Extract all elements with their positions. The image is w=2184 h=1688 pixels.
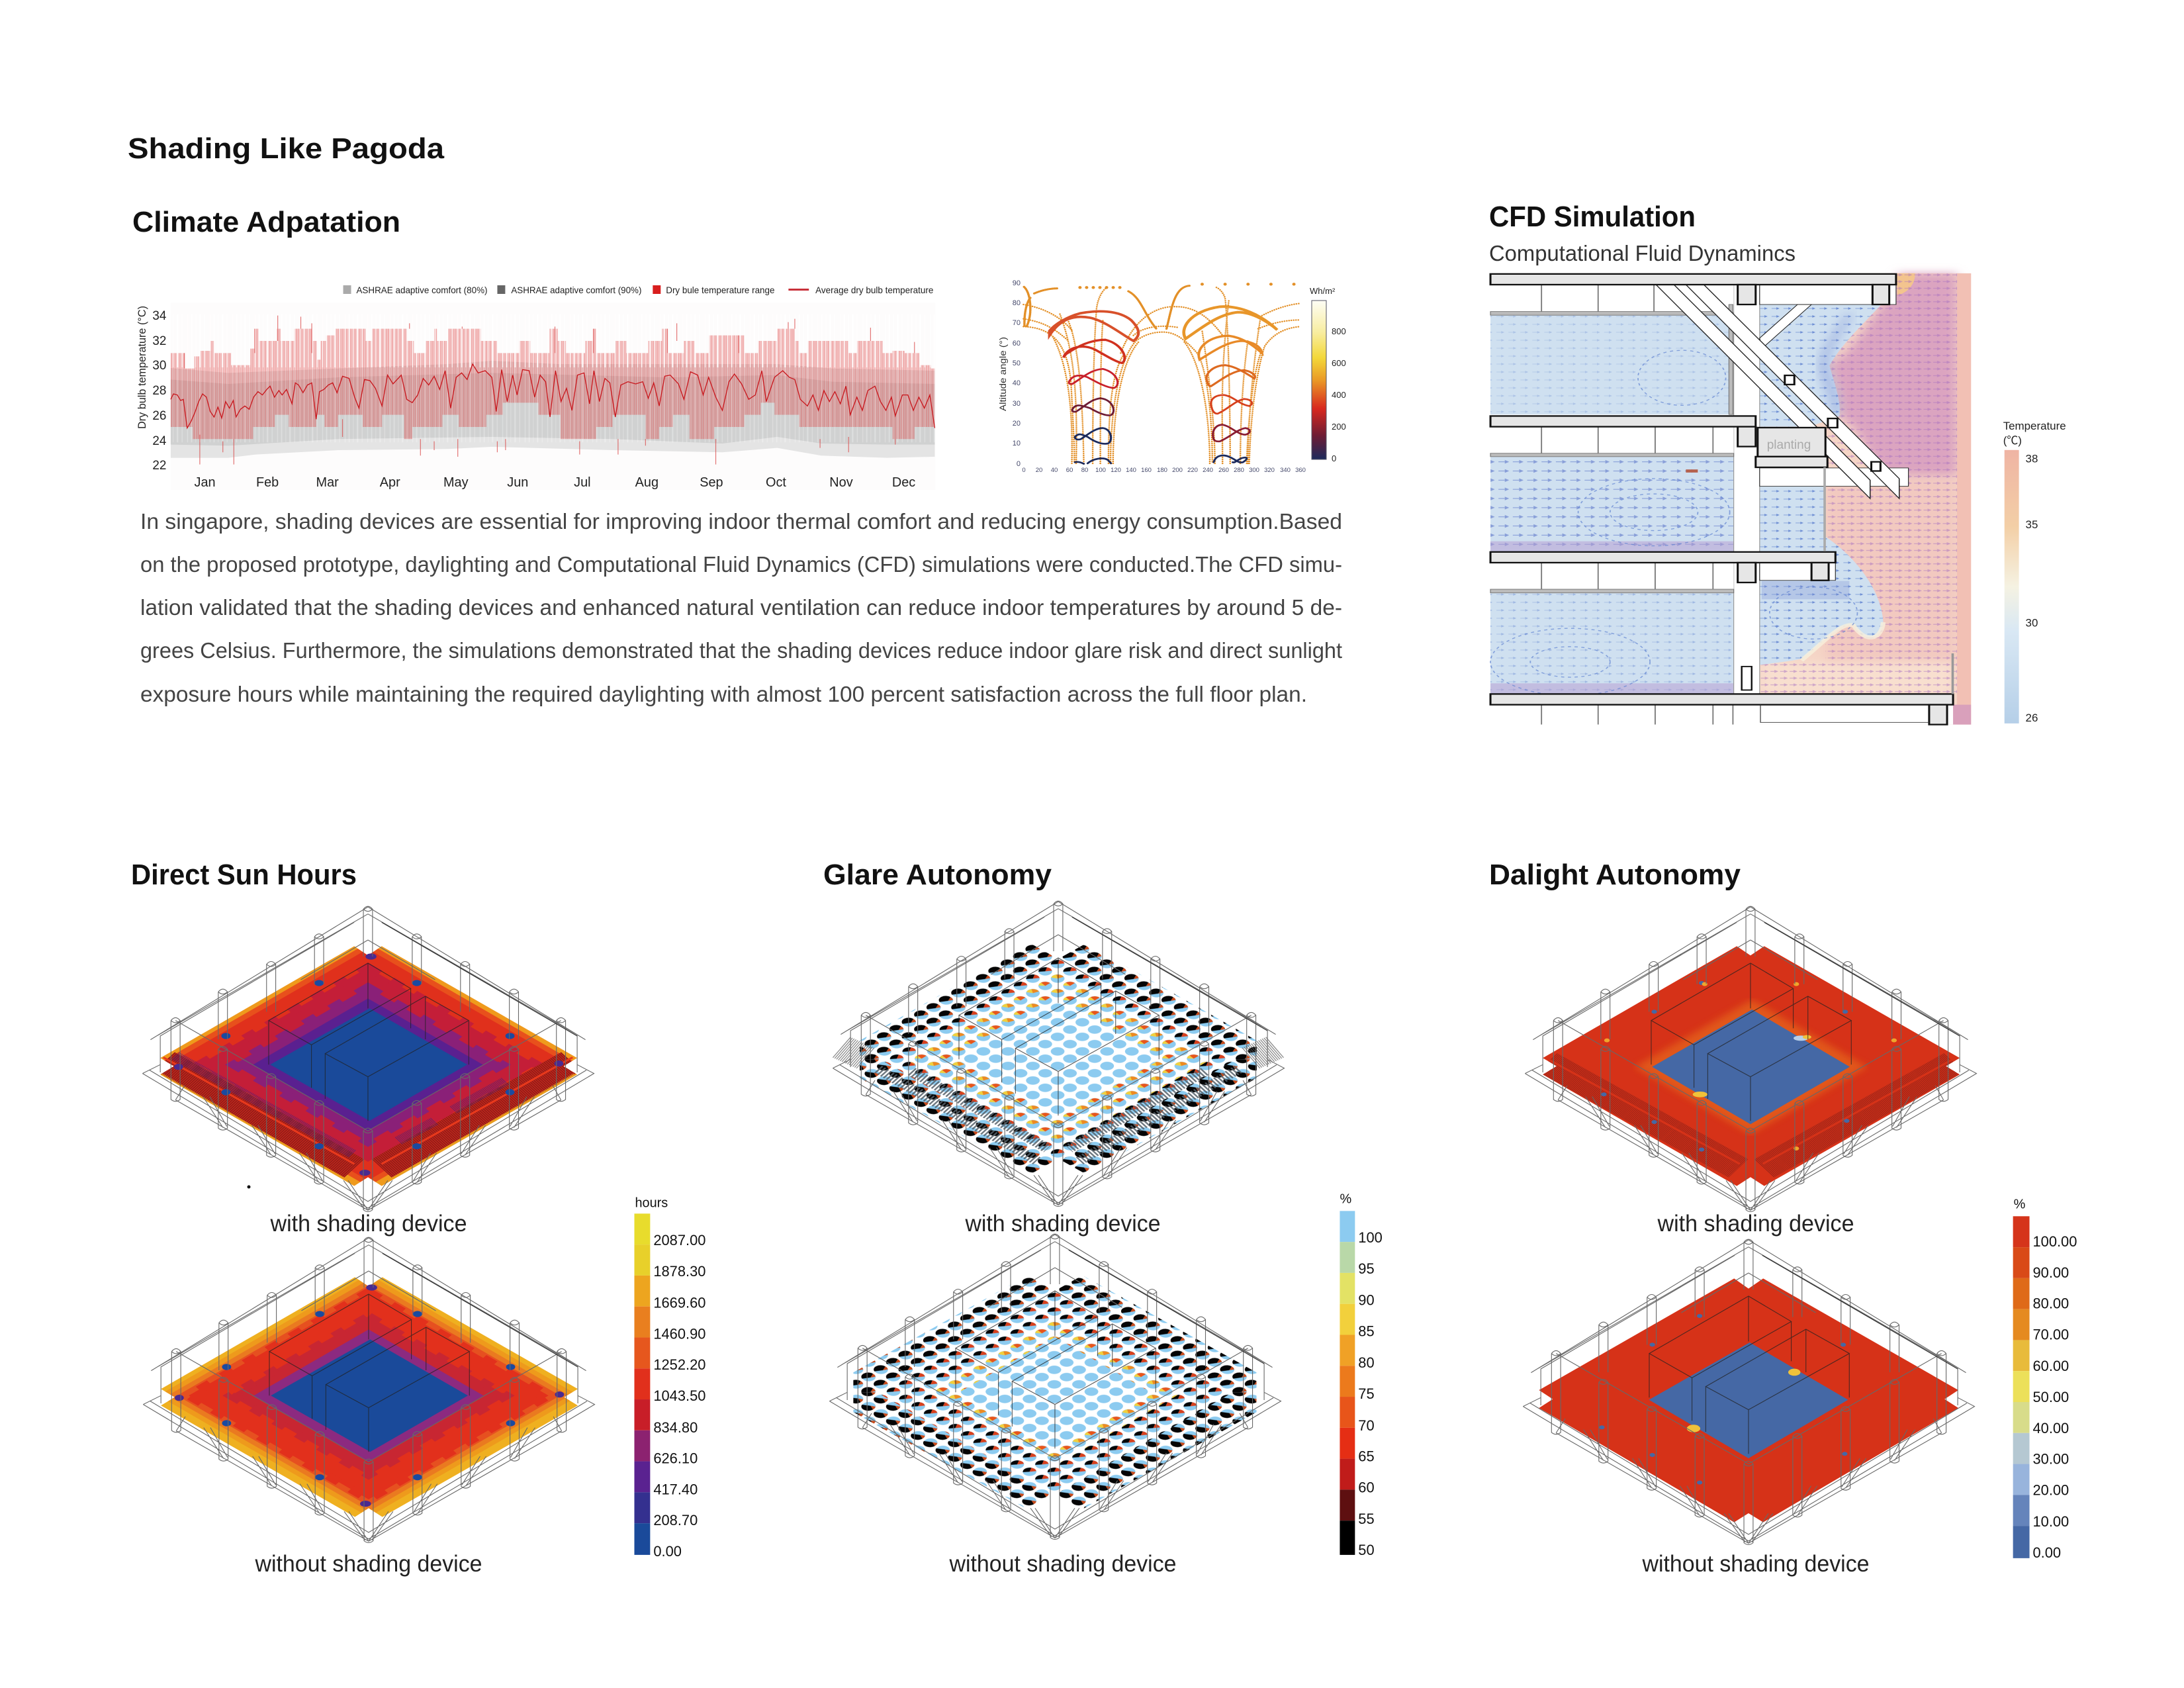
month labels <box>194 475 915 490</box>
legend: Dry bule temperature range <box>666 285 774 295</box>
month labels: Nov <box>829 475 853 490</box>
x ticks: 140 <box>1126 467 1136 474</box>
x ticks: 40 <box>1051 467 1058 474</box>
subheading: computational fluid dynamics: Computational Fluid Dynamincs <box>1489 241 1796 265</box>
legend: daylight percent: 90.00 <box>2032 1264 2069 1281</box>
colour bar Wh/m2 <box>1310 286 1346 463</box>
legend: hours: 1878.30 <box>653 1263 705 1280</box>
y ticks and title: 10 <box>1013 440 1021 447</box>
temperature legend: 35 <box>2026 518 2038 531</box>
y ticks and title: 40 <box>1013 379 1021 387</box>
legend: glare percent: 90 <box>1358 1292 1375 1309</box>
chart: dry bulb temperature over the year <box>136 285 935 490</box>
diagram: direct sun hours without shading <box>143 1237 594 1542</box>
diagram: glare autonomy with shading <box>833 901 1284 1206</box>
x ticks: 0 <box>1022 467 1026 474</box>
legend: glare percent: 65 <box>1358 1448 1375 1465</box>
diagram: glare autonomy without shading <box>829 1234 1281 1539</box>
month labels: Aug <box>635 475 659 490</box>
y ticks and title: 50 <box>1013 359 1021 367</box>
diagram: direct sun hours with shading <box>142 906 594 1211</box>
legend: glare percent: 55 <box>1358 1511 1375 1527</box>
y axis labels: 26 <box>152 409 166 423</box>
month labels: Sep <box>700 475 723 490</box>
legend: hours: 208.70 <box>653 1512 698 1528</box>
legend: hours: 834.80 <box>653 1419 698 1436</box>
x ticks: 280 <box>1234 467 1244 474</box>
text block: climate paragraph: on the proposed prototype, daylighting and Computational Fluid Dynamics (CFD) simulations were conducted.The CFD simu- <box>140 552 1342 577</box>
x ticks: 220 <box>1187 467 1198 474</box>
legend: hours: 1669.60 <box>653 1295 705 1311</box>
y ticks and title: Altitude angle (°) <box>997 337 1008 411</box>
month labels: Apr <box>380 475 400 490</box>
legend: glare percent: 60 <box>1358 1479 1375 1495</box>
y axis labels: 24 <box>152 434 166 448</box>
legend: daylight percent: % <box>2014 1197 2025 1211</box>
heading: glare autonomy: Glare Autonomy <box>823 859 1052 891</box>
x ticks: 260 <box>1218 467 1229 474</box>
legend: hours: 417.40 <box>653 1481 698 1497</box>
y axis labels: 32 <box>152 334 166 348</box>
diagram: daylight autonomy without shading <box>1523 1239 1974 1544</box>
text block: climate paragraph <box>140 509 1342 706</box>
legend: hours: 626.10 <box>653 1450 698 1467</box>
legend: daylight percent: 0.00 <box>2032 1544 2061 1561</box>
x ticks: 240 <box>1203 467 1213 474</box>
month labels: Jun <box>507 475 528 490</box>
x ticks: 200 <box>1172 467 1183 474</box>
x ticks: 320 <box>1264 467 1275 474</box>
x ticks: 360 <box>1295 467 1306 474</box>
y ticks and title <box>997 279 1021 468</box>
legend: hours: 1252.20 <box>653 1356 705 1373</box>
text block: climate paragraph: In singapore, shading devices are essential for improving indoor thermal comfort and reducing energy consumption.Based <box>140 509 1342 534</box>
month labels: Jan <box>194 475 216 490</box>
y axis labels: 22 <box>152 459 166 473</box>
x ticks: 80 <box>1081 467 1088 474</box>
legend: Average dry bulb temperature <box>815 285 933 295</box>
y axis labels: 28 <box>152 384 166 398</box>
temperature legend: Temperature <box>2003 420 2066 432</box>
legend: ASHRAE adaptive comfort (90%) <box>511 285 641 295</box>
heading: CFD simulation: CFD Simulation <box>1489 201 1696 233</box>
chart: sun path altitude <box>997 279 1346 474</box>
legend: glare percent: 100 <box>1358 1229 1383 1246</box>
temperature legend <box>2003 420 2066 724</box>
legend: glare percent: 50 <box>1358 1542 1375 1558</box>
y axis labels: 34 <box>152 309 166 323</box>
legend: hours: 1043.50 <box>653 1387 705 1404</box>
title: Shading Like Pagoda <box>128 132 445 165</box>
legend: glare percent: 85 <box>1358 1323 1375 1339</box>
month labels: Feb <box>256 475 279 490</box>
caption: with shading device (glare): with shading device <box>965 1211 1161 1237</box>
legend: daylight percent <box>2013 1197 2077 1561</box>
month labels: May <box>443 475 469 490</box>
colour bar Wh/m2: Wh/m² <box>1310 286 1336 296</box>
colour bar Wh/m2: 0 <box>1332 453 1336 463</box>
legend: daylight percent: 50.00 <box>2032 1389 2069 1405</box>
y axis labels: Dry bulb temperature (°C) <box>136 306 148 429</box>
colour bar Wh/m2: 800 <box>1332 326 1346 336</box>
legend: daylight percent: 40.00 <box>2032 1420 2069 1436</box>
text block: climate paragraph: grees Celsius. Furthermore, the simulations demonstrated that the shading devices reduce indoor glare risk and direct sunlight <box>140 638 1342 663</box>
x ticks: 340 <box>1280 467 1291 474</box>
temperature legend: (℃) <box>2003 434 2022 447</box>
panel: CFD section <box>1490 273 2066 725</box>
heading: daylight autonomy: Dalight Autonomy <box>1489 859 1741 891</box>
x ticks: 120 <box>1111 467 1121 474</box>
temperature legend: 38 <box>2026 453 2038 465</box>
x ticks: 180 <box>1157 467 1167 474</box>
caption: with shading device (sun hours): with shading device <box>270 1211 467 1237</box>
legend: daylight percent: 30.00 <box>2032 1451 2069 1468</box>
colour bar Wh/m2: 400 <box>1332 390 1346 400</box>
y axis labels: 30 <box>152 359 166 373</box>
x ticks: 100 <box>1095 467 1106 474</box>
legend: hours: 1460.90 <box>653 1325 705 1342</box>
y ticks and title: 60 <box>1013 340 1021 348</box>
x ticks: 20 <box>1036 467 1042 474</box>
x ticks: 300 <box>1249 467 1259 474</box>
y ticks and title: 90 <box>1013 279 1021 287</box>
text block: climate paragraph: exposure hours while maintaining the required daylighting with almost 100 percent satisfaction across the full floor plan. <box>140 682 1307 706</box>
diagram: daylight autonomy with shading <box>1525 906 1976 1211</box>
legend: hours <box>634 1196 705 1560</box>
legend: daylight percent: 10.00 <box>2032 1513 2069 1530</box>
legend <box>343 285 933 295</box>
legend: ASHRAE adaptive comfort (80%) <box>356 285 488 295</box>
caption: without shading device (sun hours): without shading device <box>255 1551 482 1577</box>
y axis labels <box>136 306 166 473</box>
colour bar Wh/m2: 200 <box>1332 422 1346 432</box>
y ticks and title: 0 <box>1017 460 1021 468</box>
x ticks: 60 <box>1066 467 1073 474</box>
legend: hours: 2087.00 <box>653 1232 705 1248</box>
speck <box>248 1185 250 1189</box>
legend: glare percent: 70 <box>1358 1417 1375 1434</box>
month labels: Oct <box>766 475 786 490</box>
temperature legend: 30 <box>2026 617 2038 630</box>
legend: daylight percent: 70.00 <box>2032 1326 2069 1342</box>
month labels: Jul <box>574 475 591 490</box>
y ticks and title: 20 <box>1013 420 1021 428</box>
planting label: planting <box>1767 438 1811 452</box>
y ticks and title: 30 <box>1013 400 1021 408</box>
exterior temperature field <box>1760 273 1971 725</box>
building section structure <box>1490 274 1954 725</box>
colour bar Wh/m2: 600 <box>1332 358 1346 368</box>
heading: direct sun hours: Direct Sun Hours <box>131 859 357 891</box>
text block: climate paragraph: lation validated that the shading devices and enhanced natural ventilation can reduce indoor temperatures by around 5 de- <box>140 595 1342 620</box>
caption: with shading device (daylight): with shading device <box>1657 1211 1854 1237</box>
legend: hours: 0.00 <box>653 1543 682 1560</box>
month labels: Mar <box>316 475 339 490</box>
legend: daylight percent: 100.00 <box>2032 1233 2077 1250</box>
caption: without shading device (glare): without shading device <box>949 1551 1177 1577</box>
interior rooms airflow <box>1490 315 1857 696</box>
legend: hours: hours <box>635 1196 668 1210</box>
x ticks <box>1022 467 1306 474</box>
legend: glare percent: 75 <box>1358 1385 1375 1402</box>
legend: daylight percent: 80.00 <box>2032 1295 2069 1312</box>
legend: glare percent <box>1340 1192 1383 1558</box>
legend: daylight percent: 60.00 <box>2032 1358 2069 1374</box>
legend: glare percent: 80 <box>1358 1354 1375 1371</box>
heading: climate adaptation: Climate Adpatation <box>132 206 400 238</box>
legend: glare percent: % <box>1340 1192 1351 1206</box>
x ticks: 160 <box>1141 467 1152 474</box>
legend: glare percent: 95 <box>1358 1260 1375 1277</box>
month labels: Dec <box>892 475 915 490</box>
caption: without shading device (daylight): without shading device <box>1642 1551 1869 1577</box>
temperature legend: 26 <box>2026 712 2038 724</box>
legend: daylight percent: 20.00 <box>2032 1481 2069 1498</box>
y ticks and title: 80 <box>1013 299 1021 307</box>
y ticks and title: 70 <box>1013 319 1021 327</box>
